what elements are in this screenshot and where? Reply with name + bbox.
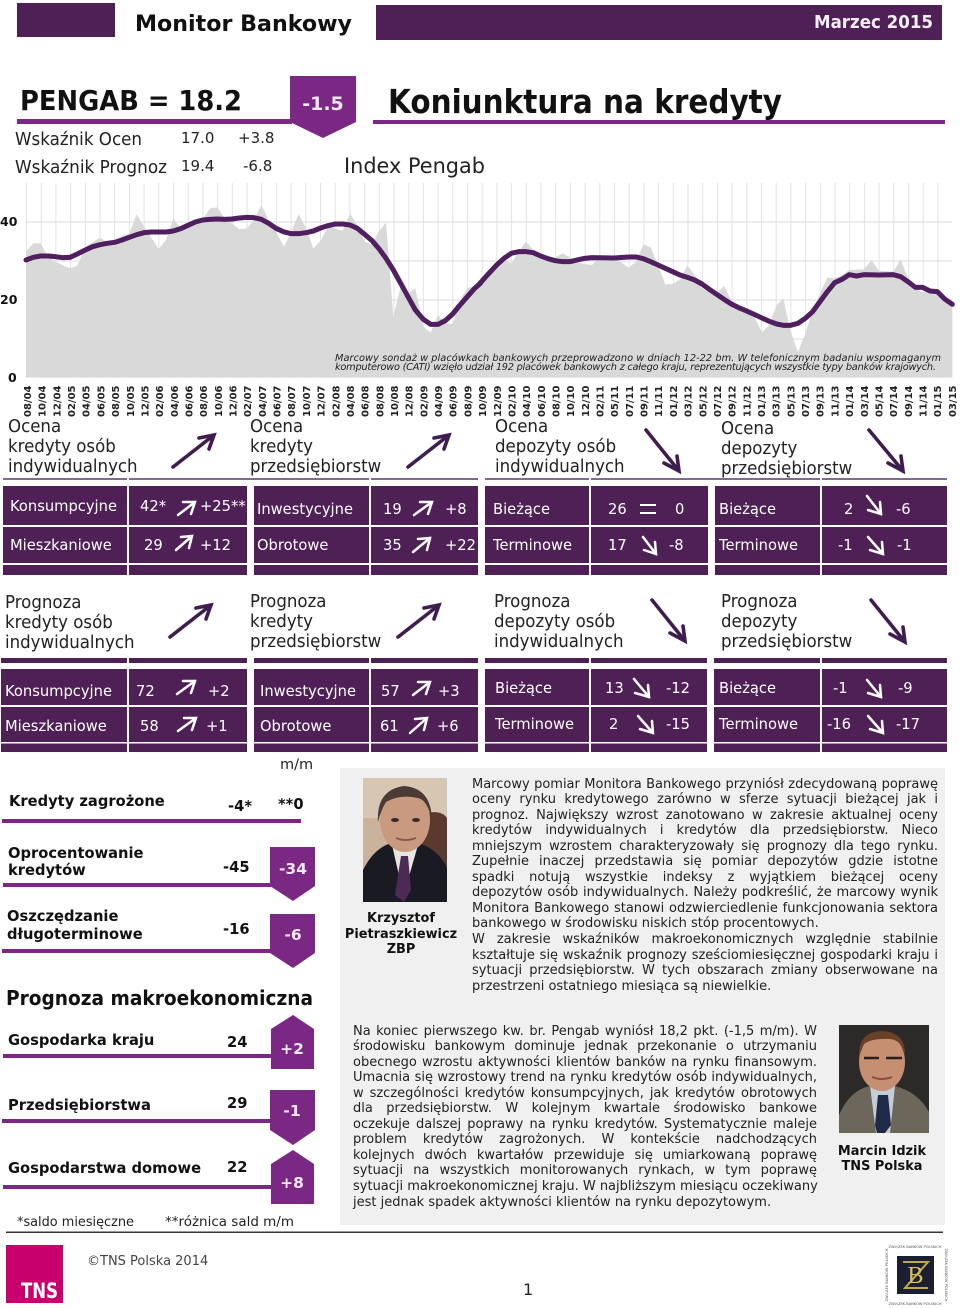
table: ocena depozyty osób: 0 (675, 501, 684, 518)
table: prognoza depozyty przedsiębiorstw: Bieżące (719, 680, 776, 697)
logo: TNS (6, 1245, 63, 1303)
commentary text: Pietraszkiewicz: prognoz. Największy wzrost zanotowano w zakresie aktualnej oceny (472, 808, 938, 823)
table: prognoza depozyty przedsiębiorstw (714, 658, 947, 752)
heading: Prognoza makroekonomiczna: Prognoza makroekonomiczna (6, 986, 313, 1010)
arrow up: prognoza kredyty przedsiebiorstw (398, 605, 439, 637)
table: ocena kredyty przedsiębiorstw: +8 (445, 501, 467, 518)
commentary text: Pietraszkiewicz: sytuacji przedsiębiorstw. W tych obszarach zmiany obserwowane na (472, 963, 938, 978)
photo: Marcin Idzik (839, 1025, 929, 1133)
table: ocena kredyty osób: 42* (140, 498, 166, 515)
y axis labels (0, 214, 18, 385)
x axis labels: 02/05 (67, 385, 78, 417)
heading: Ocena kredyty osób indywidualnych: Ocena (8, 417, 61, 437)
commentary text: Idzik: sytuacji na wszystkich monitorowanych rynkach, w tym poprawę (353, 1163, 817, 1178)
indicator: Wskaźnik Ocen: +3.8 (238, 129, 274, 147)
table: prognoza kredyty osób: 58 (140, 718, 159, 735)
row: Oprocentowanie kredytów: kredytów (8, 862, 86, 879)
x axis labels: 08/08 (375, 385, 386, 417)
heading: Ocena kredyty osób indywidualnych (8, 417, 138, 477)
row: Oprocentowanie kredytów: -34 (279, 860, 307, 878)
table: prognoza kredyty osób (1, 658, 247, 752)
heading: Ocena depozyty osób indywidualnych: indywidualnych (495, 457, 625, 477)
commentary text: Idzik: oczekuje dalszej poprawy na rynku kredytów. Systematycznie maleje (353, 1117, 817, 1132)
heading: Prognoza depozyty przedsiębiorstw: Prognoza (721, 592, 797, 612)
x axis labels: 01/14 (845, 385, 856, 417)
name: Marcin Idzik TNS Polska: TNS Polska (841, 1159, 923, 1174)
column label m/m: m/m (280, 757, 313, 773)
x axis labels: 10/06 (214, 385, 225, 417)
row: Gospodarstwa domowe: 22 (227, 1159, 247, 1176)
x axis labels: 08/07 (287, 385, 298, 417)
table: ocena kredyty przedsiębiorstw: 19 (383, 501, 402, 518)
name: Marcin Idzik TNS Polska (838, 1144, 926, 1174)
x axis labels: 01/12 (669, 385, 680, 417)
commentary text: Idzik: jest jednak spadek aktywności klientów na rynku depozytowym. (353, 1195, 771, 1210)
arrow up: ocena kredyty osob (173, 435, 214, 467)
survey note: komputerowo (CATI) wzięło udział 192 placówek bankowych z całego kraju, reprezentujących wszystkie typy banków krajowych. (335, 361, 936, 373)
commentary text: Idzik: problem kredytów zagrożonych. W kontekście nadchodzących (353, 1132, 817, 1147)
x axis labels (23, 385, 959, 417)
y axis labels: 20 (0, 292, 18, 307)
row: Oszczędzanie długoterminowe (2, 908, 315, 968)
indicator: Wskaźnik Prognoz: 19.4 (181, 157, 214, 175)
table: prognoza depozyty osób: -15 (666, 716, 690, 733)
x axis labels: 07/13 (801, 385, 812, 417)
row: Gospodarka kraju (3, 1015, 314, 1069)
heading: Prognoza depozyty osób indywidualnych: depozyty osób (494, 612, 615, 632)
row: Oprocentowanie kredytów: Oprocentowanie (8, 845, 144, 862)
name: Krzysztof Pietraszkiewicz ZBP: Krzysztof (367, 911, 435, 926)
header bar left (17, 3, 115, 37)
table: ocena kredyty osób: +25** (200, 498, 246, 515)
x axis labels: 06/09 (449, 385, 460, 417)
x axis labels: 12/04 (52, 385, 63, 417)
footnotes: *saldo miesięczne (17, 1214, 134, 1230)
commentary text: Idzik: w szczególności kredytów konsumpcyjnych, jak kredytów obrotowych (353, 1086, 817, 1101)
table: prognoza depozyty przedsiębiorstw: -9 (898, 680, 913, 697)
x axis labels: 04/10 (522, 385, 533, 417)
area series right (480, 242, 952, 378)
table: ocena depozyty osób (485, 486, 708, 575)
commentary text: Idzik: Umacnia się wzrostowy trend na rynku kredytów osób indywidualnych, (353, 1070, 817, 1085)
heading: Prognoza depozyty osób indywidualnych: indywidualnych (494, 632, 624, 652)
table: ocena depozyty osób: -8 (669, 537, 684, 554)
PENGAB headline: PENGAB = 18.2 (20, 84, 242, 117)
x axis labels: 12/09 (493, 385, 504, 417)
row: Oszczędzanie długoterminowe: długoterminowe (7, 926, 143, 943)
commentary text: Pietraszkiewicz: mniejszym wzrostem charakteryzowały się prognozy dla tego rynku. (472, 839, 938, 854)
table: prognoza kredyty przedsiębiorstw (254, 658, 478, 752)
x axis labels: 12/08 (405, 385, 416, 417)
name: Krzysztof Pietraszkiewicz ZBP: ZBP (387, 942, 415, 957)
logo: Związek Banków Polskich: ZWIĄZEK BANKÓW POLSKICH (944, 1249, 949, 1302)
x axis labels: 12/10 (581, 385, 592, 417)
x axis labels: 04/09 (434, 385, 445, 417)
logo: Związek Banków Polskich (884, 1243, 949, 1306)
commentary text: Pietraszkiewicz: bankowego w środowisku niskich stóp procentowych. (472, 916, 819, 931)
x axis labels: 08/06 (199, 385, 210, 417)
x axis labels: 02/06 (155, 385, 166, 417)
heading: Prognoza kredyty osób indywidualnych: Prognoza (5, 593, 81, 613)
x axis labels: 03/15 (948, 385, 959, 417)
row: Gospodarstwa domowe: +8 (280, 1174, 304, 1192)
table: prognoza depozyty osób (485, 658, 707, 752)
x axis labels: 02/11 (596, 385, 606, 417)
commentary text: Pietraszkiewicz: kształtuje się wskaźnik prognozy sześciomiesięcznej gospodarki kraju i (472, 948, 938, 963)
commentary text: Pietraszkiewicz: Marcowy pomiar Monitora Bankowego przyniósł zdecydowaną poprawę (472, 776, 938, 792)
table: prognoza depozyty osób: Terminowe (494, 716, 574, 733)
commentary text: Pietraszkiewicz: oceny rynku kredytowego zarówno w sferze sytuacji bieżącej jak i (472, 792, 938, 807)
x axis labels: 12/05 (140, 385, 151, 417)
x axis labels: 04/05 (82, 385, 93, 417)
arrow down: ocena depozyty osob (646, 430, 679, 471)
table: ocena depozyty przedsiębiorstw: -6 (896, 501, 911, 518)
x axis labels: 02/09 (419, 385, 430, 417)
heading: Prognoza kredyty przedsiębiorstw: przedsiębiorstw (250, 632, 381, 652)
logo: Związek Banków Polskich: ZWIĄZEK BANKÓW POLSKICH (889, 1244, 942, 1249)
x axis labels: 08/09 (463, 385, 474, 417)
arrow up: prognoza kredyty osob (170, 605, 211, 637)
x axis labels: 06/06 (184, 385, 196, 417)
x axis labels: 06/05 (96, 385, 107, 417)
chart: Index Pengab (26, 183, 952, 378)
arrow down: prognoza depozyty osob (652, 600, 685, 641)
heading: Ocena depozyty przedsiębiorstw: Ocena (721, 419, 774, 439)
header bar right with date (376, 5, 942, 40)
area series left (26, 205, 480, 378)
table: prognoza depozyty osób: 13 (605, 680, 624, 697)
table: prognoza kredyty przedsiębiorstw: +3 (438, 683, 460, 700)
table: ocena depozyty przedsiębiorstw: Terminowe (718, 537, 798, 554)
table: prognoza depozyty osób: 2 (609, 716, 618, 733)
x axis labels: 10/09 (478, 385, 489, 417)
table: prognoza kredyty osób: Mieszkaniowe (5, 718, 107, 735)
x axis labels: 02/08 (331, 385, 342, 417)
table: ocena depozyty osób: Bieżące (493, 501, 550, 518)
table: ocena depozyty przedsiębiorstw: 2 (844, 501, 853, 518)
chart title: Index Pengab: Index Pengab (344, 154, 485, 178)
indicator: Wskaźnik Ocen (15, 129, 274, 150)
x axis labels: 12/06 (228, 385, 240, 417)
commentary text: Idzik (352, 1024, 818, 1210)
logo: Związek Banków Polskich: B (907, 1263, 924, 1289)
heading: Prognoza kredyty osób indywidualnych (5, 593, 135, 653)
x axis labels: 07/14 (889, 385, 900, 417)
arrow up: ocena kredyty przedsiebiorstw (408, 435, 449, 467)
x axis labels: 11/11 (654, 385, 665, 417)
row: Oprocentowanie kredytów (3, 845, 315, 901)
x axis labels: 06/10 (537, 385, 548, 417)
table: prognoza depozyty przedsiębiorstw: -17 (896, 716, 920, 733)
x axis labels: 05/13 (786, 385, 797, 417)
heading: Ocena depozyty przedsiębiorstw: przedsiębiorstw (721, 459, 852, 479)
commentary text: Pietraszkiewicz: depozytów osób indywidualnych. Należy podkreślić, że marcowy wynik (472, 885, 938, 900)
footer rule (6, 1232, 943, 1233)
table: prognoza kredyty osób: Konsumpcyjne (5, 683, 112, 700)
heading: Prognoza depozyty przedsiębiorstw: przedsiębiorstw (721, 632, 852, 652)
x axis labels: 03/12 (684, 385, 695, 417)
commentary text: Idzik: Na koniec pierwszego kw. br. Pengab wyniósł 18,2 pkt. (-1,5 m/m). W (353, 1024, 817, 1038)
heading: Ocena depozyty osób indywidualnych: depozyty osób (495, 437, 616, 457)
heading: Ocena kredyty przedsiębiorstw: przedsiębiorstw (250, 457, 381, 477)
heading: Prognoza kredyty osób indywidualnych: indywidualnych (5, 633, 135, 653)
x axis labels: 05/14 (874, 385, 885, 417)
row: Gospodarstwa domowe: Gospodarstwa domowe (8, 1160, 201, 1177)
row: Kredyty zagrożone (2, 793, 304, 823)
survey note: Marcowy sondaż w placówkach bankowych przeprowadzono w dniach 12-22 bm. W telefonicznym badaniu wspomaganym (335, 352, 941, 364)
x axis labels: 06/07 (273, 385, 284, 417)
x axis labels: 09/12 (728, 385, 739, 417)
table: prognoza depozyty przedsiębiorstw: -16 (827, 716, 851, 733)
commentary text: Pietraszkiewicz: W zakresie wskaźników makroekonomicznych względnie stabilnie (472, 932, 938, 947)
heading: Ocena depozyty osób indywidualnych: Ocena (495, 417, 548, 437)
table: ocena depozyty przedsiębiorstw: -1 (838, 537, 853, 554)
x axis labels: 09/13 (816, 385, 827, 417)
x axis labels: 04/08 (346, 385, 357, 417)
x axis labels: 11/14 (918, 385, 930, 417)
row: Kredyty zagrożone: -4* (228, 798, 252, 815)
name: Marcin Idzik TNS Polska: Marcin Idzik (838, 1144, 926, 1159)
indicator: Wskaźnik Ocen: Wskaźnik Ocen (15, 130, 142, 150)
table: prognoza depozyty przedsiębiorstw: Terminowe (718, 716, 798, 733)
page number: 1 (523, 1280, 533, 1299)
row: Gospodarka kraju: +2 (280, 1040, 304, 1058)
indicator: Wskaźnik Prognoz: -6.8 (243, 157, 272, 175)
logo: TNS: TNS (21, 1279, 58, 1303)
table: ocena kredyty osób: +12 (200, 537, 231, 554)
heading: Ocena kredyty osób indywidualnych: indywidualnych (8, 457, 138, 477)
commentary text: Idzik: kolejnych dwóch kwartałów przewiduje się umiarkowaną poprawę (353, 1148, 817, 1163)
x axis labels: 05/12 (698, 385, 709, 417)
table: ocena kredyty osób: Mieszkaniowe (10, 537, 112, 554)
x axis labels: 10/05 (126, 385, 137, 417)
x axis labels: 06/08 (361, 385, 372, 417)
commentary text: Pietraszkiewicz: spadki notują wszystkie indeksy z wyjątkiem bieżącej oceny (472, 870, 938, 885)
row: Oszczędzanie długoterminowe: -16 (223, 921, 250, 938)
table: prognoza kredyty osób: +1 (206, 718, 228, 735)
x axis labels: 08/04 (23, 385, 34, 417)
table rule ocena (3, 478, 947, 480)
table: ocena depozyty przedsiębiorstw (715, 486, 947, 575)
heading: Prognoza depozyty przedsiębiorstw: depozyty (721, 612, 797, 632)
PENGAB underline (17, 119, 292, 124)
table: ocena kredyty przedsiębiorstw: Obrotowe (257, 537, 328, 554)
table: prognoza depozyty osób: Bieżące (495, 680, 552, 697)
table: prognoza kredyty przedsiębiorstw: 61 (380, 718, 399, 735)
table: prognoza kredyty przedsiębiorstw: Obrotowe (260, 718, 331, 735)
row: Gospodarka kraju: 24 (227, 1034, 247, 1051)
x axis labels: 10/10 (566, 385, 577, 417)
row: Gospodarka kraju: Gospodarka kraju (8, 1032, 154, 1049)
name: Krzysztof Pietraszkiewicz ZBP: Pietraszkiewicz (345, 927, 457, 942)
table: ocena depozyty osób: 17 (608, 537, 627, 554)
commentary text: Idzik: obecnego wzrostu aktywności klientów banków na rynku finansowym. (353, 1055, 817, 1070)
commentary panel background (340, 768, 945, 1225)
footnotes (17, 1214, 294, 1230)
row: Przedsiębiorstwa (2, 1090, 315, 1145)
table: ocena kredyty osób: Konsumpcyjne (10, 498, 117, 515)
row: Oszczędzanie długoterminowe: -6 (284, 926, 302, 944)
heading: Ocena kredyty przedsiębiorstw (250, 417, 381, 477)
heading: Prognoza kredyty przedsiębiorstw (250, 592, 381, 652)
arrow down: ocena depozyty przedsiebiorstw (869, 430, 903, 471)
y axis labels: 40 (0, 214, 18, 229)
table: ocena depozyty przedsiębiorstw: -1 (897, 537, 912, 554)
indicator: Wskaźnik Ocen: 17.0 (181, 129, 214, 147)
heading: Ocena kredyty przedsiębiorstw: kredyty (250, 437, 313, 457)
table: ocena kredyty przedsiębiorstw: 35 (383, 537, 402, 554)
x axis labels: 07/12 (713, 385, 724, 417)
heading: Prognoza depozyty osób indywidualnych: Prognoza (494, 592, 570, 612)
heading: Prognoza kredyty przedsiębiorstw: Prognoza (250, 592, 326, 612)
row: Przedsiębiorstwa: Przedsiębiorstwa (8, 1097, 151, 1114)
table: prognoza kredyty przedsiębiorstw: 57 (381, 683, 400, 700)
survey note (335, 352, 941, 373)
x axis labels: 09/11 (640, 385, 651, 417)
x axis labels: 08/10 (552, 385, 562, 417)
row: Przedsiębiorstwa: 29 (227, 1095, 247, 1112)
x axis labels: 10/04 (38, 385, 49, 417)
y axis labels: 0 (8, 370, 17, 385)
indicator: Wskaźnik Prognoz: Wskaźnik Prognoz (15, 158, 167, 178)
copyright: ©TNS Polska 2014 (87, 1254, 208, 1269)
x axis labels: 01/13 (757, 385, 768, 417)
x axis labels: 04/06 (170, 385, 181, 417)
commentary text: Pietraszkiewicz (472, 776, 938, 994)
x axis labels: 11/12 (742, 385, 753, 417)
x axis labels: 11/13 (830, 385, 841, 417)
commentary text: Pietraszkiewicz: Zupełnie inaczej przedstawia się pomiar depozytów gdzie istotne (472, 854, 938, 869)
commentary text: Pietraszkiewicz: kredytów indywidualnych i kredytów dla przedsiębiorstw. Nieco (472, 823, 938, 838)
name: Krzysztof Pietraszkiewicz ZBP (345, 911, 457, 957)
row: Oprocentowanie kredytów: -45 (223, 859, 250, 876)
table: ocena depozyty przedsiębiorstw: Bieżące (719, 501, 776, 518)
heading: Koniunktura na kredyty: Koniunktura na kredyty (388, 83, 782, 121)
badge: PENGAB change: -1.5 (302, 93, 344, 115)
x axis labels: 10/08 (390, 385, 401, 417)
table: prognoza kredyty przedsiębiorstw: +6 (437, 718, 459, 735)
commentary text: Pietraszkiewicz: Monitora Bankowego stanowi odzwierciedlenie funkcjonowania sektora (472, 901, 938, 916)
heading: Ocena kredyty przedsiębiorstw: Ocena (250, 417, 303, 437)
trend line left (26, 217, 480, 324)
table: prognoza depozyty osób: -12 (666, 680, 690, 697)
table: ocena depozyty osób: 26 (608, 501, 627, 518)
x axis labels: 02/07 (243, 385, 254, 417)
heading: Prognoza depozyty osób indywidualnych (494, 592, 624, 652)
heading: Ocena kredyty osób indywidualnych: kredyty osób (8, 437, 116, 457)
photo: Krzysztof Pietraszkiewicz (363, 778, 447, 902)
table: prognoza kredyty osób: 72 (136, 683, 155, 700)
footnotes: **różnica sald m/m (165, 1214, 294, 1230)
heading: Prognoza kredyty przedsiębiorstw: kredyty (250, 612, 313, 632)
x axis labels: 02/10 (507, 385, 518, 417)
table: prognoza kredyty osób: +2 (208, 683, 230, 700)
x axis labels: 03/13 (772, 385, 783, 417)
commentary text: Idzik: sytuacji makroekonomicznej kraju. W najbliższym miesiącu oczekiwany (353, 1179, 818, 1194)
header bar right with date: Marzec 2015 (814, 13, 933, 33)
table: ocena kredyty przedsiębiorstw (254, 486, 478, 575)
commentary text: Idzik: dla przedsiębiorstw. W kolejnym kwartale środowisko bankowe (353, 1101, 817, 1116)
title: Monitor Bankowy: Monitor Bankowy (135, 11, 352, 37)
table: ocena kredyty osób: 29 (144, 537, 163, 554)
x axis labels: 08/05 (111, 385, 122, 417)
heading: Ocena depozyty przedsiębiorstw (721, 419, 852, 479)
row: Kredyty zagrożone: **0 (278, 796, 304, 813)
heading: Ocena depozyty osób indywidualnych (495, 417, 625, 477)
table: prognoza kredyty przedsiębiorstw: Inwestycyjne (260, 683, 356, 700)
x axis labels: 07/11 (625, 385, 636, 417)
table: prognoza depozyty przedsiębiorstw: -1 (833, 680, 848, 697)
table: ocena kredyty przedsiębiorstw: Inwestycyjne (257, 501, 353, 518)
table: ocena depozyty osób: Terminowe (492, 537, 572, 554)
heading: Prognoza kredyty osób indywidualnych: kredyty osób (5, 613, 113, 633)
row: Oszczędzanie długoterminowe: Oszczędzanie (7, 908, 118, 925)
x axis labels: 03/14 (860, 385, 871, 417)
logo: Związek Banków Polskich: ZWIĄZEK BANKÓW POLSKICH (889, 1301, 942, 1306)
heading: Prognoza depozyty przedsiębiorstw (721, 592, 852, 652)
x axis labels: 05/11 (610, 385, 621, 417)
row: Gospodarstwa domowe (3, 1150, 314, 1204)
x axis labels: 09/14 (904, 385, 915, 417)
table: ocena kredyty przedsiębiorstw: +22 (445, 537, 476, 554)
commentary text: Idzik: środowisku bankowym dominuje jednak przekonanie o utrzymaniu (353, 1039, 817, 1054)
x axis labels: 01/15 (933, 385, 944, 417)
commentary text: Pietraszkiewicz: przestrzeni ostatniego miesiąca są niewielkie. (472, 979, 771, 994)
row: Przedsiębiorstwa: -1 (283, 1102, 301, 1120)
heading: Ocena depozyty przedsiębiorstw: depozyty (721, 439, 797, 459)
badge: PENGAB change (290, 76, 356, 138)
arrow down: prognoza depozyty przedsiebiorstw (871, 600, 905, 642)
indicator: Wskaźnik Prognoz (15, 157, 272, 178)
heading underline (373, 120, 945, 124)
x axis labels: 04/07 (258, 385, 269, 417)
logo: Związek Banków Polskich: ZWIĄZEK BANKÓW POLSKICH (884, 1248, 889, 1301)
table: ocena kredyty osób (3, 486, 247, 575)
x axis labels: 10/07 (302, 385, 313, 417)
row: Kredyty zagrożone: Kredyty zagrożone (9, 793, 165, 810)
trend line right (480, 252, 952, 325)
x axis labels: 12/07 (317, 385, 328, 417)
